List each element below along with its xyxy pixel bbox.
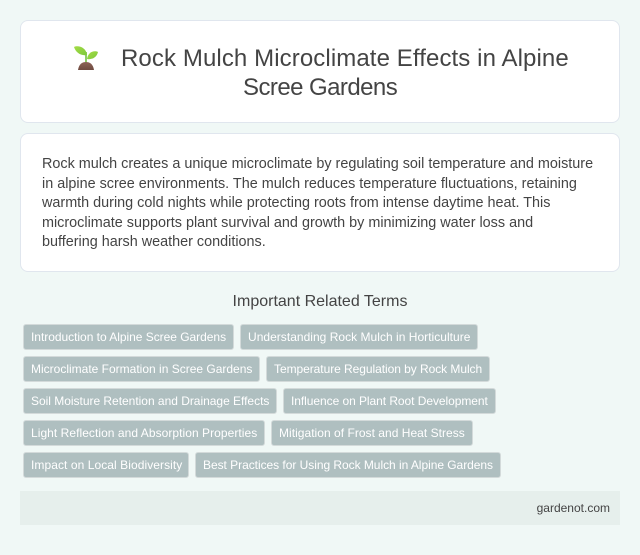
title	[121, 45, 569, 101]
description text: in alpine scree environments. The mulch reduces temperature fluctuations, retaining	[42, 176, 577, 192]
chip: Temperature Regulation by Rock Mulch	[274, 362, 482, 376]
chip	[23, 420, 265, 446]
chip	[240, 324, 478, 350]
description text: microclimate supports plant survival and growth by minimizing water loss and	[42, 215, 533, 231]
description text: Rock mulch creates a unique microclimate by regulating soil temperature and moisture	[42, 156, 593, 172]
chip	[266, 356, 490, 382]
chip	[195, 452, 501, 478]
chip	[23, 324, 234, 350]
icon: seedling	[74, 46, 98, 70]
chip	[23, 388, 277, 414]
chip: Microclimate Formation in Scree Gardens	[31, 362, 252, 376]
description text: warmth during cold nights while protecting roots from intense daytime heat. This	[42, 195, 550, 211]
description text: buffering harsh weather conditions.	[42, 234, 266, 250]
chip: Influence on Plant Root Development	[291, 394, 488, 408]
chip	[23, 452, 189, 478]
chip	[271, 420, 473, 446]
title: Scree Gardens	[243, 74, 397, 101]
heading: related terms: Important Related Terms	[233, 293, 407, 310]
panel: term chips	[23, 324, 501, 478]
panel: description card	[20, 133, 620, 272]
chip: Light Reflection and Absorption Properties	[31, 426, 257, 440]
chip: Mitigation of Frost and Heat Stress	[279, 426, 465, 440]
chip	[283, 388, 496, 414]
title: Rock Mulch Microclimate Effects in Alpine	[121, 45, 569, 72]
chip: Best Practices for Using Rock Mulch in Alpine Gardens	[203, 458, 493, 472]
chip: Soil Moisture Retention and Drainage Effects	[31, 394, 269, 408]
footer source: gardenot.com	[537, 501, 610, 515]
chip	[23, 356, 260, 382]
footer bar	[20, 491, 620, 525]
chip: Impact on Local Biodiversity	[31, 458, 182, 472]
chip: Understanding Rock Mulch in Horticulture	[248, 330, 470, 344]
panel: title card	[20, 20, 620, 123]
chip: Introduction to Alpine Scree Gardens	[31, 330, 226, 344]
description text	[42, 156, 593, 250]
